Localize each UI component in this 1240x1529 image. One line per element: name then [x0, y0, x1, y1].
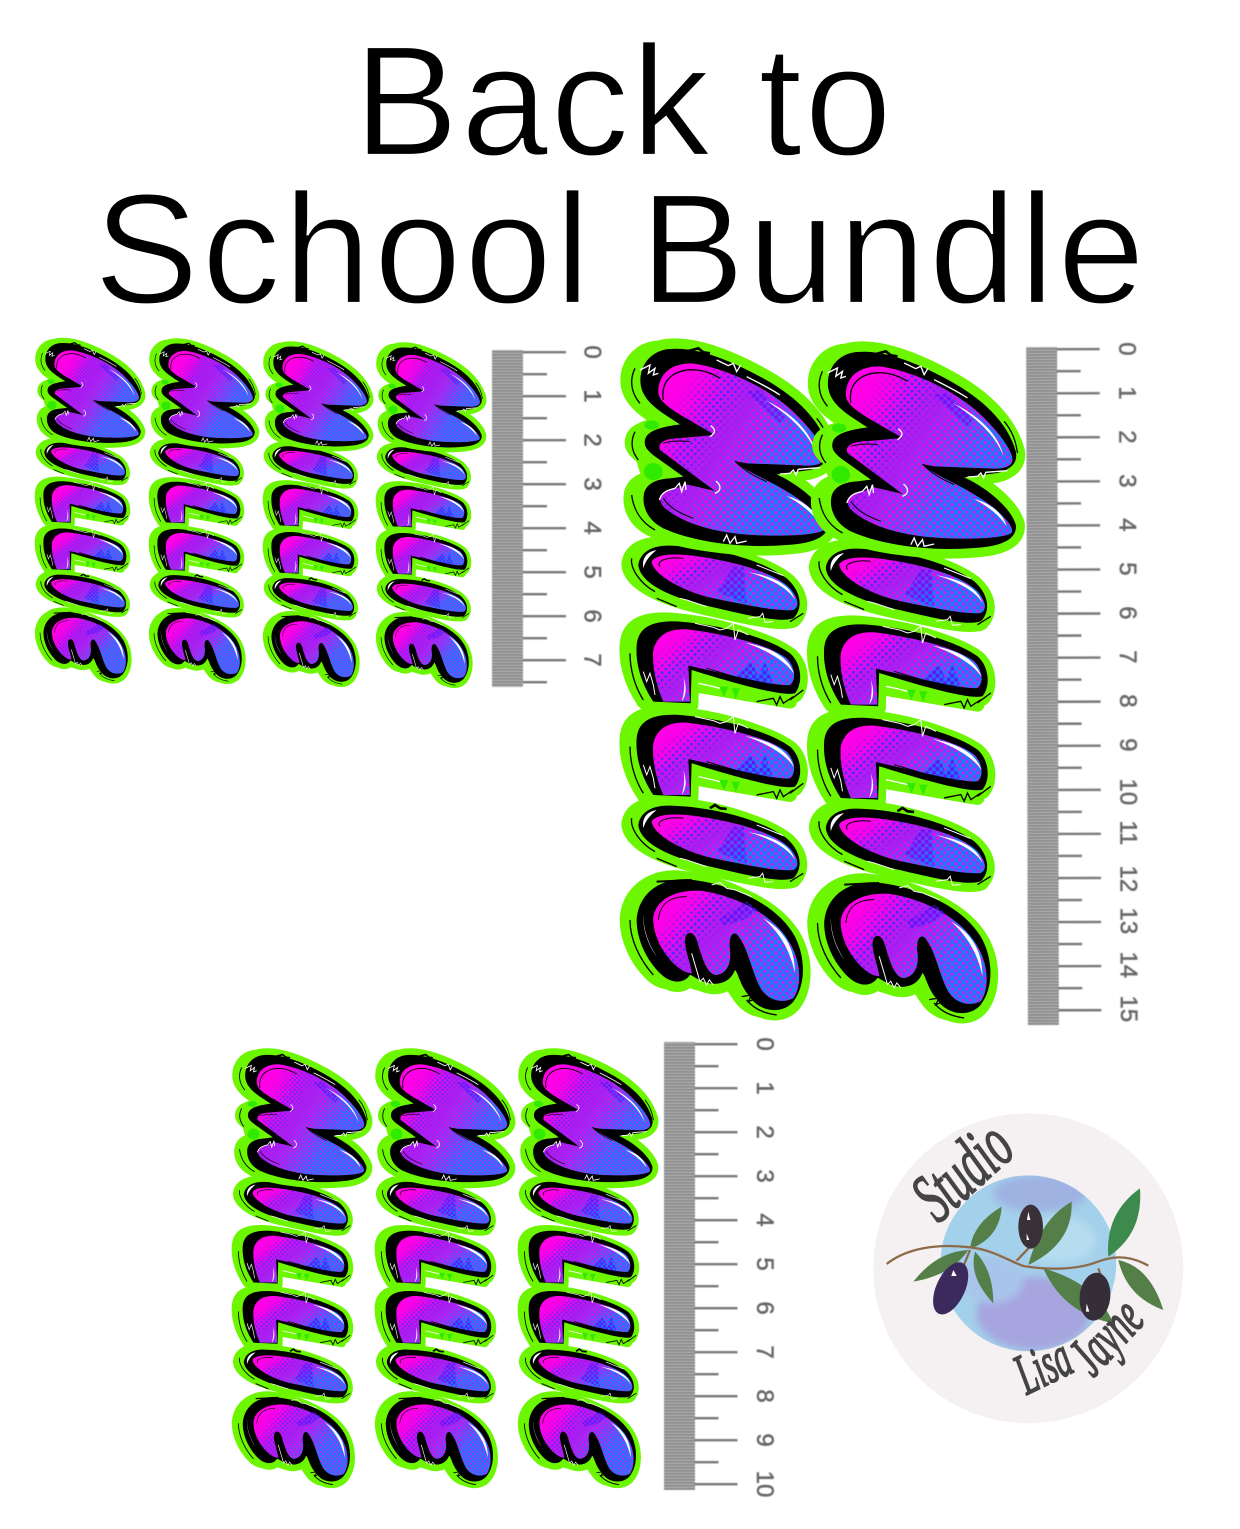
sticker: small 1 — [39, 343, 141, 681]
sticker: small 3 — [267, 346, 369, 684]
ruler: 0 to 10: 9 — [751, 1433, 778, 1447]
ruler: 0 to 7: 6 — [578, 609, 606, 623]
ruler: 0 to 10: 1 — [751, 1081, 778, 1095]
ruler: 0 to 10: 5 — [751, 1257, 778, 1271]
ruler: 0 to 7 — [492, 345, 606, 687]
sticker: small 4 — [380, 347, 482, 685]
olive branch — [887, 1188, 1163, 1323]
sticker: large 1 — [628, 348, 830, 1015]
logo text — [896, 1106, 1156, 1407]
ruler: 0 to 10: 3 — [751, 1169, 778, 1183]
sticker: medium 3 — [523, 1055, 653, 1485]
ruler: 0 to 15: 10 — [1114, 778, 1141, 805]
ruler: 0 to 10: 7 — [751, 1345, 778, 1359]
ruler: 0 to 10: 8 — [751, 1389, 778, 1403]
logo: Studio Lisa Jayne — [873, 1106, 1183, 1423]
ruler: 0 to 15: 5 — [1114, 562, 1141, 576]
logo text: Studio — [896, 1106, 1028, 1236]
ruler: 0 to 7: 4 — [578, 521, 606, 535]
ruler: 0 to 10: 6 — [751, 1301, 778, 1315]
ruler: 0 to 15: 9 — [1114, 738, 1141, 752]
ruler: 0 to 15: 8 — [1114, 694, 1141, 708]
ruler: 0 to 15 — [1026, 342, 1142, 1025]
sticker set: small row, 7 inch — [39, 343, 482, 685]
ruler: 0 to 15: 6 — [1114, 606, 1141, 620]
ruler: 0 to 15: 13 — [1115, 907, 1142, 934]
ruler: 0 to 10: 0 — [751, 1037, 778, 1051]
title: Back to — [354, 14, 894, 189]
ruler: 0 to 10: 10 — [751, 1471, 778, 1497]
ruler: 0 to 15: 1 — [1113, 386, 1140, 400]
watercolor globe — [940, 1175, 1116, 1351]
ruler: 0 to 10: 2 — [751, 1125, 778, 1139]
logo text: Lisa — [1003, 1324, 1082, 1407]
ruler: 0 to 15: 0 — [1113, 342, 1140, 356]
ruler: 0 to 10: 4 — [751, 1213, 778, 1227]
ruler: 0 to 15: 12 — [1114, 865, 1142, 892]
logo text: Jayne — [1055, 1286, 1156, 1387]
ruler: 0 to 7: 5 — [578, 565, 606, 579]
olive top — [1018, 1205, 1043, 1249]
ruler: 0 to 15: 3 — [1113, 474, 1140, 488]
title — [94, 14, 1148, 337]
ruler: 0 to 7: 7 — [578, 653, 606, 667]
sticker: small 2 — [153, 343, 255, 681]
sticker: large 2 — [815, 351, 1017, 1018]
sticker set: large pair, 15 inch — [628, 348, 1017, 1018]
sticker: medium 2 — [380, 1055, 510, 1485]
ruler: 0 to 7: 1 — [578, 389, 606, 403]
ruler: 0 to 15: 7 — [1114, 650, 1141, 664]
ruler: 0 to 15: 4 — [1114, 518, 1141, 532]
ruler: 0 to 15: 2 — [1113, 430, 1140, 444]
olive right — [1077, 1271, 1113, 1322]
sticker set: medium row, 10 inch — [237, 1055, 653, 1485]
olive left — [926, 1257, 975, 1320]
ruler: 0 to 15: 15 — [1115, 995, 1142, 1022]
title: School Bundle — [94, 162, 1148, 337]
ruler: 0 to 7: 2 — [578, 433, 606, 447]
ruler: 0 to 15: 11 — [1114, 820, 1141, 845]
sticker: medium 1 — [237, 1055, 367, 1485]
ruler: 0 to 7: 3 — [578, 477, 606, 491]
ruler: 0 to 10 — [664, 1037, 778, 1497]
ruler: 0 to 7: 0 — [578, 345, 606, 359]
ruler: 0 to 15: 14 — [1115, 951, 1142, 978]
